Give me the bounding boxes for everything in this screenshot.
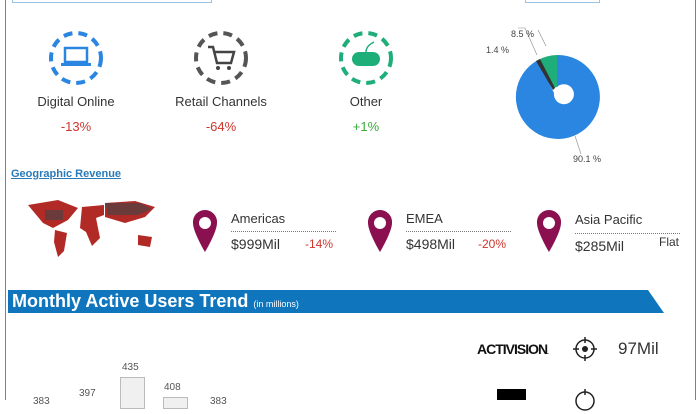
bar chart	[33, 362, 227, 409]
label: retail: Retail Channels	[175, 94, 267, 109]
bar chart: 397	[79, 388, 96, 399]
label: digital online	[37, 94, 115, 134]
donut chart	[486, 28, 601, 164]
heading: geographic revenue: Geographic Revenue	[11, 168, 121, 180]
text: 383	[210, 396, 227, 407]
icon: pin	[192, 210, 218, 252]
icon: target	[573, 337, 597, 361]
region: emea: -20%	[478, 237, 506, 251]
donut chart: 1.4 %	[486, 45, 509, 55]
label: digital online: -13%	[61, 119, 91, 134]
icon: target 2	[575, 389, 595, 411]
donut chart: 90.1 %	[573, 154, 601, 164]
label: other: Other	[350, 94, 382, 109]
donut chart: 8.5 %	[511, 29, 534, 39]
label: other	[350, 94, 382, 134]
icon: pin	[536, 210, 562, 252]
region: asia pacific: Asia Pacific	[575, 212, 642, 227]
icon: other gamepad	[339, 31, 393, 85]
top heading underline right	[525, 0, 600, 3]
region: americas: $999Mil	[231, 236, 280, 252]
region: americas: Americas	[231, 211, 285, 226]
banner: monthly active users	[8, 290, 664, 313]
region: asia pacific	[536, 210, 680, 254]
label: retail: -64%	[206, 119, 236, 134]
region: asia pacific: Flat	[659, 235, 679, 249]
icon: digital online	[49, 31, 103, 85]
icon: pin	[368, 210, 392, 252]
banner: monthly active users: Monthly Active Users Trend (in millions)	[12, 291, 299, 311]
world map	[28, 200, 155, 257]
region: emea	[368, 210, 511, 252]
region: americas	[192, 210, 336, 252]
label: other: +1%	[353, 119, 379, 134]
region: emea: $498Mil	[406, 236, 455, 252]
logo: activision: ACTIVISION.	[477, 341, 548, 357]
bar chart: 408	[164, 382, 181, 393]
region: emea: EMEA	[406, 211, 443, 226]
top heading underline left	[12, 0, 212, 3]
icon: retail cart	[194, 31, 248, 85]
text: 383	[33, 396, 50, 407]
label: retail	[175, 94, 267, 134]
logo: black square	[497, 389, 526, 400]
stat: 97Mil: 97Mil	[618, 339, 659, 358]
bar chart: 435	[122, 362, 139, 373]
region: asia pacific: $285Mil	[575, 238, 624, 254]
region: americas: -14%	[305, 237, 333, 251]
label: digital online: Digital Online	[37, 94, 115, 109]
